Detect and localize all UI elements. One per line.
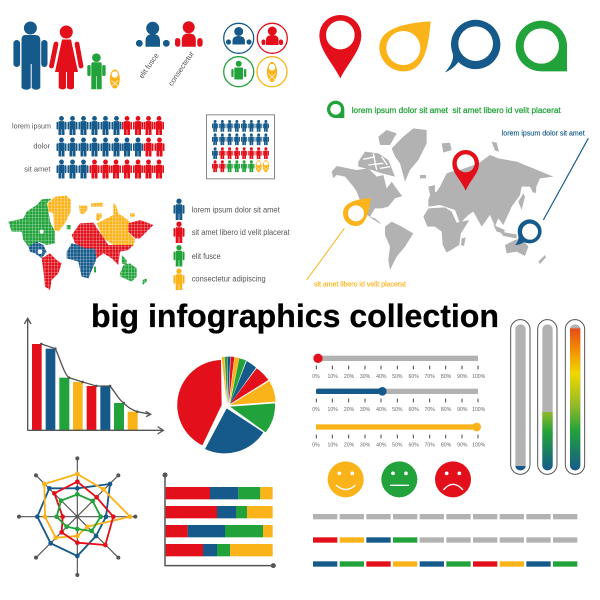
slider tick labels: 40% — [376, 407, 387, 413]
legend item 4: consectetur adipiscing — [192, 274, 266, 284]
slider tick labels: 70% — [425, 443, 435, 449]
slider tick labels: 60% — [409, 407, 419, 413]
slider tick labels: 20% — [344, 443, 355, 449]
slider 2: 40% blue — [316, 387, 478, 396]
slider tick labels: 10% — [328, 374, 338, 380]
icon: family of four — [13, 22, 120, 90]
legend item 1: lorem ipsum dolor sit amet — [192, 206, 280, 214]
thermometer 1 — [511, 320, 530, 474]
slider tick labels: 80% — [441, 374, 452, 380]
slider tick labels: 80% — [441, 407, 452, 413]
slider tick labels: 50% — [392, 407, 403, 413]
text: green caption: lorem ipsum dolor sit amet sit amet libero id velit placerat — [352, 105, 561, 115]
slider tick labels: 30% — [360, 443, 371, 449]
dash progress bars — [313, 514, 577, 567]
slider tick labels: 100% — [472, 374, 486, 380]
icon: woman — [52, 26, 81, 90]
icon: red circle — [257, 23, 287, 53]
pictogram rows — [56, 116, 164, 178]
small yellow pin — [343, 198, 371, 226]
slider ticks — [316, 366, 478, 438]
labels: pictogram rows — [12, 122, 51, 174]
slider tick labels: 60% — [409, 374, 419, 380]
slider tick labels: 90% — [457, 374, 468, 380]
map: dotted colored world — [5, 190, 165, 305]
row 2 — [56, 138, 164, 156]
legend: world colors — [174, 198, 290, 290]
icon: blue bust — [136, 22, 170, 47]
chart: pie — [177, 357, 276, 453]
slider tick labels — [312, 374, 486, 449]
slider tick labels: 50% — [392, 443, 403, 449]
yellow leader line — [307, 228, 344, 280]
icon: yellow circle — [257, 57, 287, 87]
thermometer 2 — [538, 320, 557, 474]
icon: red bust — [175, 21, 203, 47]
chart: bar with trend line — [24, 318, 163, 434]
large green pin — [516, 21, 567, 71]
slider tick labels: 90% — [457, 443, 468, 449]
icon: blue circle — [224, 23, 254, 53]
sad face — [435, 461, 471, 497]
icon: man — [13, 22, 47, 90]
chart: stacked bars — [162, 472, 276, 568]
icon: green circle — [224, 57, 254, 87]
slider 1: 0% red — [313, 354, 478, 363]
thermometers — [511, 320, 585, 474]
happy face — [328, 461, 364, 497]
slider 3: 100% yellow — [316, 423, 481, 431]
slider tick labels: 90% — [457, 407, 468, 413]
slider tick labels: 0% — [312, 374, 320, 380]
row 1 — [56, 116, 164, 135]
gray world map and pins — [307, 15, 588, 280]
title: big infographics collection — [91, 298, 499, 334]
small blue pin — [515, 219, 542, 245]
large yellow pin — [379, 21, 431, 71]
blue leader line — [543, 138, 588, 220]
labels: pictogram rows: lorem ipsum — [12, 122, 51, 131]
slider tick labels: 20% — [344, 374, 355, 380]
slider tick labels: 10% — [328, 443, 338, 449]
sliders — [312, 354, 486, 449]
legend item 2: sit amet libero id velit placerat — [192, 228, 290, 237]
slider tick labels: 80% — [441, 443, 452, 449]
slider tick labels: 70% — [425, 374, 435, 380]
icon: child — [87, 53, 106, 89]
slider tick labels: 20% — [344, 407, 355, 413]
label: elit fusce: elit fusce — [137, 51, 161, 80]
dash row 1 — [313, 514, 577, 519]
slider tick labels: 40% — [376, 374, 387, 380]
world map — [332, 128, 553, 270]
row 3 — [56, 160, 164, 178]
neutral face — [381, 461, 417, 497]
slider tick labels: 10% — [328, 407, 338, 413]
chart: radar — [17, 456, 137, 577]
slider tick labels: 30% — [360, 407, 371, 413]
slider tick labels: 70% — [425, 407, 435, 413]
slider tick labels: 100% — [472, 443, 486, 449]
slider tick labels: 0% — [312, 407, 320, 413]
thermometer 3 — [565, 320, 585, 474]
slider tick labels: 30% — [360, 374, 371, 380]
legend item 3: elit fusce — [192, 252, 221, 261]
large blue pin — [445, 20, 500, 72]
icons: four circled people — [224, 23, 287, 87]
large red pin — [319, 15, 361, 78]
arctic island cuts — [363, 153, 390, 170]
slider tick labels: 60% — [409, 443, 419, 449]
slider tick labels: 0% — [312, 443, 320, 449]
labels: pictogram rows: dolor — [33, 142, 50, 150]
text: blue caption: lorem ipsum dolor sit amet — [502, 128, 586, 138]
small red pin — [452, 150, 479, 191]
slider tick labels: 50% — [392, 374, 403, 380]
small green pin — [327, 101, 344, 118]
slider tick labels: 100% — [472, 407, 486, 413]
panel: boxed pictogram — [206, 115, 274, 179]
smileys — [328, 461, 471, 497]
text: yellow caption: sit amet libero id velit placerat — [314, 280, 407, 288]
dash row 3 — [313, 561, 577, 567]
labels: pictogram rows: sit amet — [24, 164, 51, 174]
label: consectetur: consectetur — [166, 49, 196, 88]
slider tick labels: 40% — [376, 443, 387, 449]
dash row 2 — [313, 537, 577, 543]
icon: baby — [110, 70, 120, 88]
